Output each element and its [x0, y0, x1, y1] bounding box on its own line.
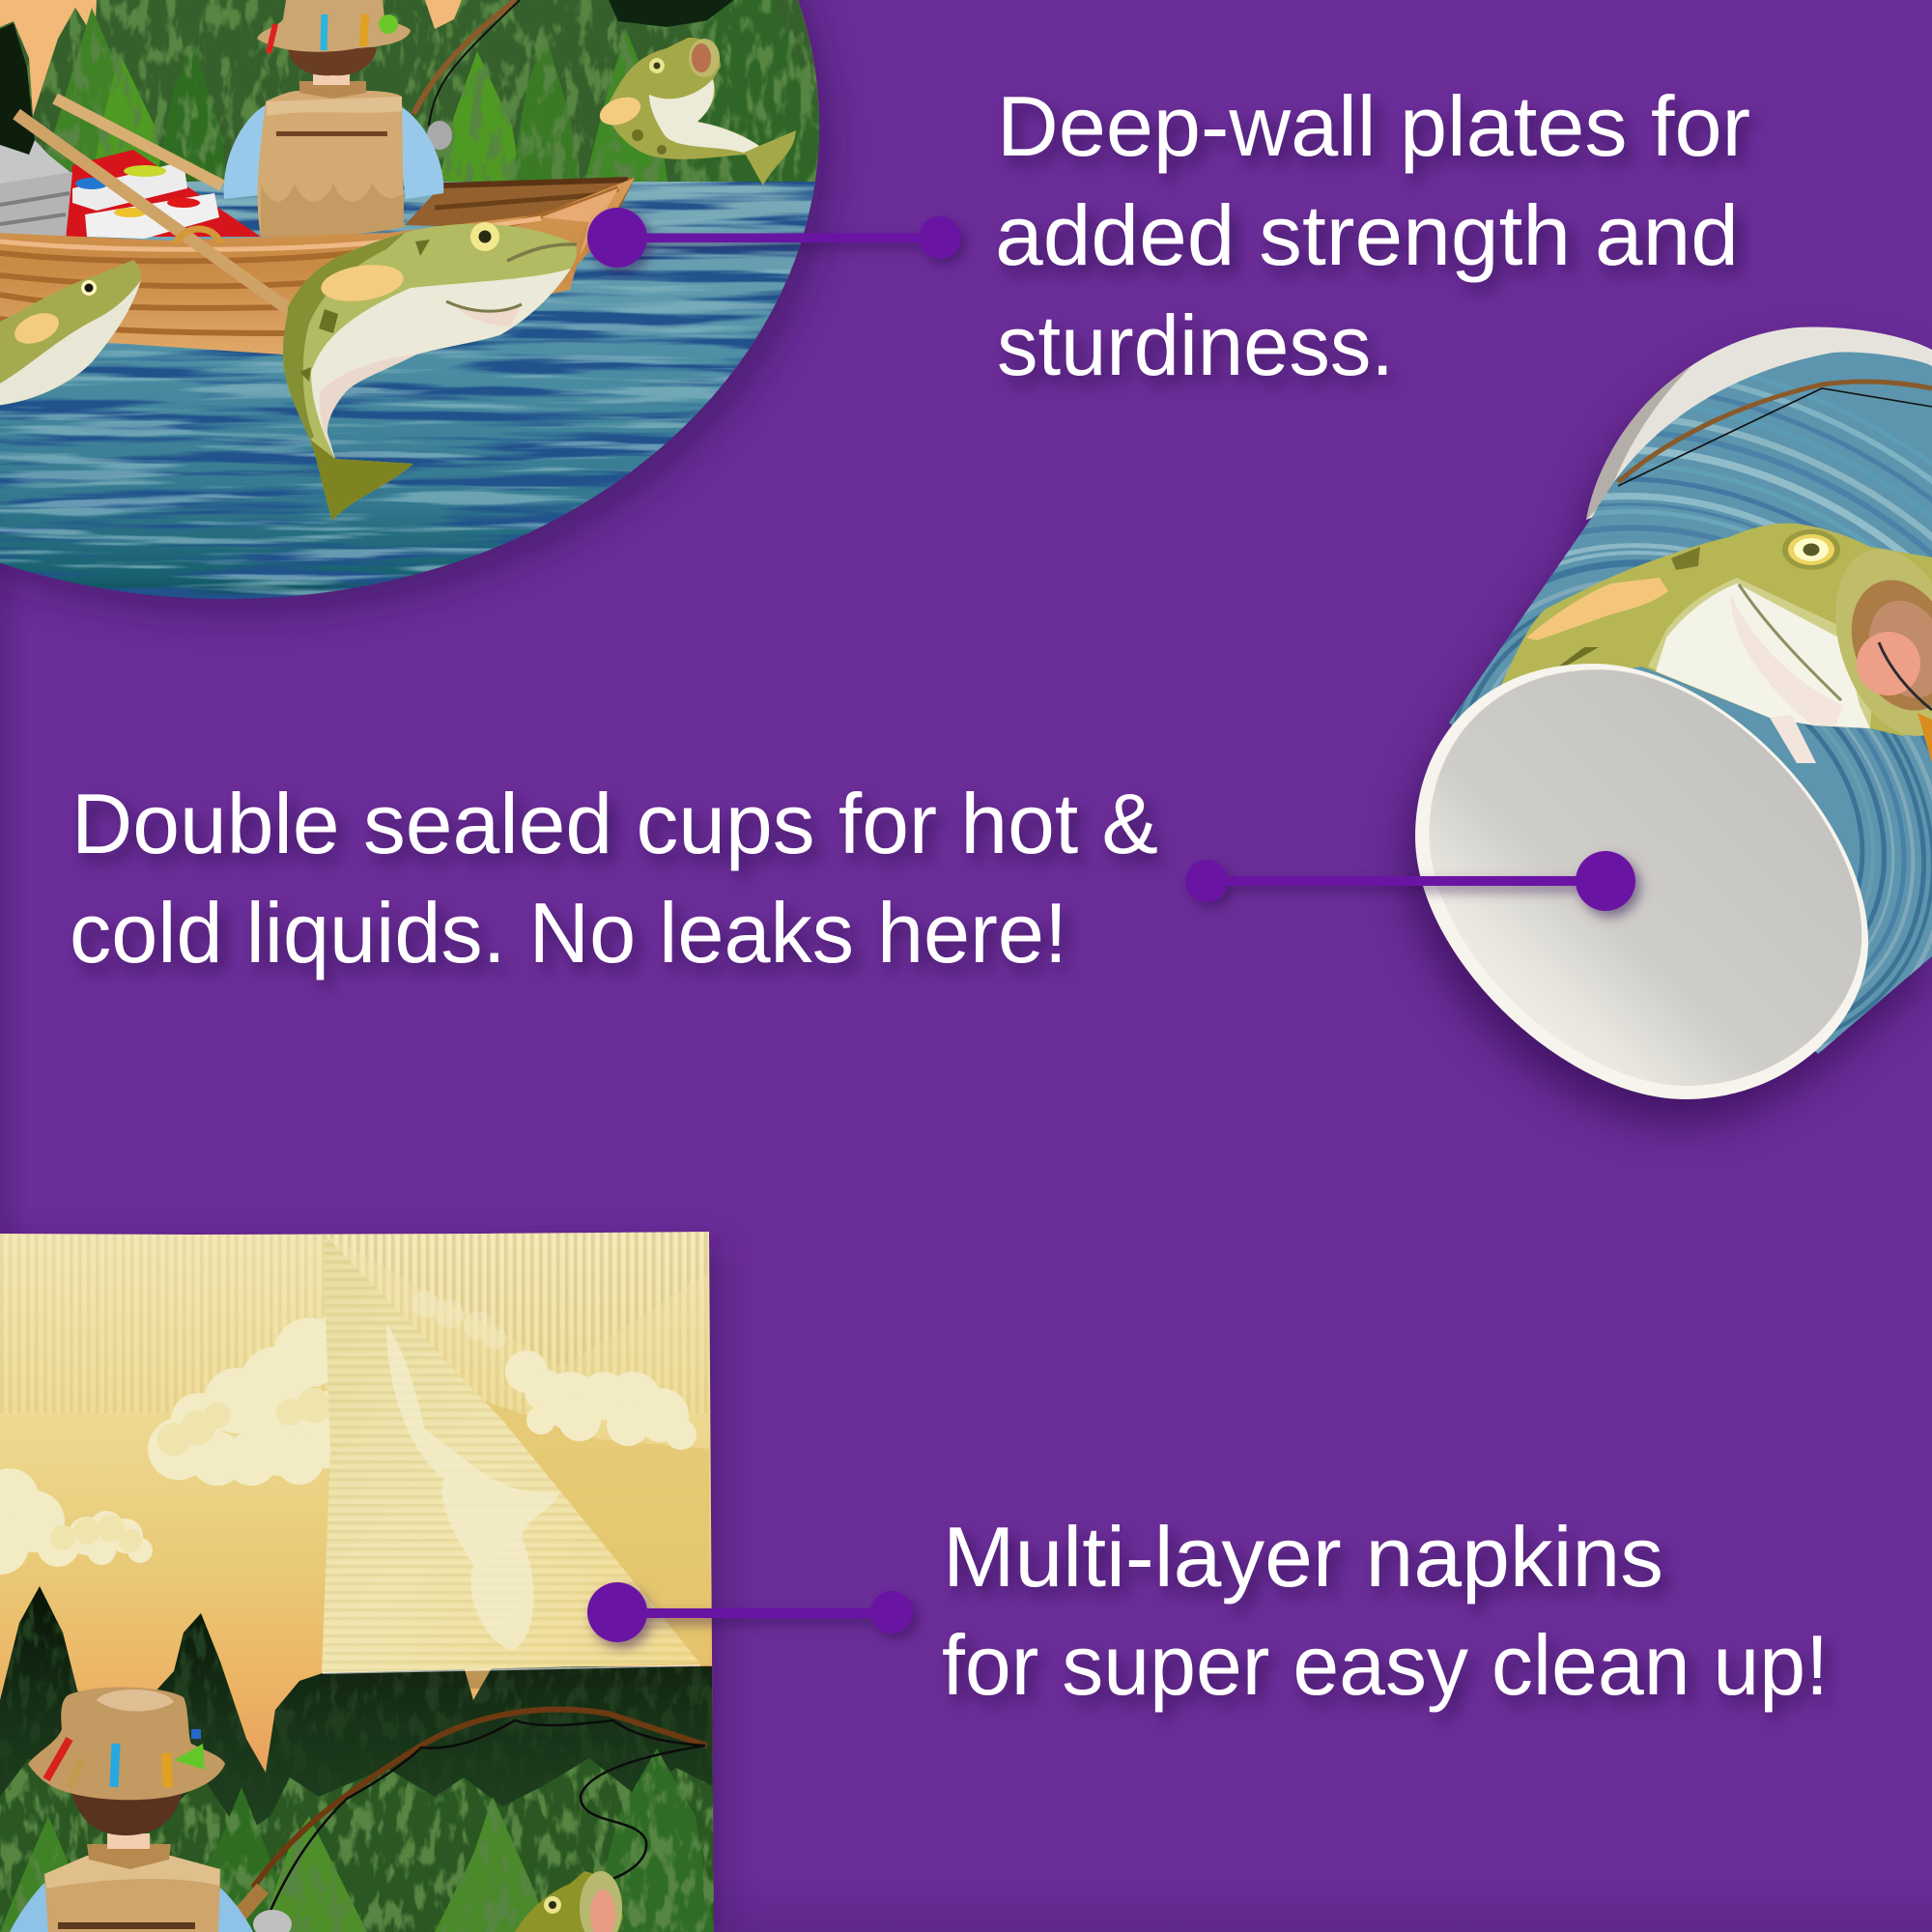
text: cups [70, 776, 1158, 980]
inner cloud tints [50, 1388, 331, 1552]
cup [1389, 327, 1932, 1144]
ribbed top band [0, 1232, 720, 1413]
text: napkins [942, 1509, 1829, 1713]
fish on napkin [515, 1871, 623, 1932]
boat hull [0, 178, 635, 355]
cup bottom [1415, 664, 1868, 1099]
boat back [405, 178, 635, 232]
forest on napkin [0, 1586, 715, 1932]
cup body with water pattern [1449, 352, 1932, 1061]
fish on cup [1500, 524, 1932, 763]
forest on plate [0, 0, 821, 251]
fishing rod on napkin [238, 1710, 707, 1932]
left fish [0, 260, 141, 406]
napkin [0, 1227, 720, 1932]
flap of napkin [322, 1233, 715, 1690]
oars [16, 99, 291, 311]
jumping fish [596, 38, 796, 185]
cup rim [1586, 327, 1932, 520]
plate shadow [0, 0, 834, 618]
text: cups: cold liquids. No leaks here! [70, 885, 1067, 980]
rod on cup [1618, 382, 1932, 486]
water on plate [0, 182, 831, 607]
text: cups: Double sealed cups for hot & [71, 776, 1158, 871]
plate connector [587, 208, 961, 268]
large fish [283, 222, 577, 521]
text: plates: sturdiness. [997, 298, 1394, 393]
cup connector [1185, 851, 1635, 911]
napkin connector [587, 1582, 913, 1642]
clouds on napkin [0, 1291, 696, 1575]
text: plates: Deep-wall plates for [997, 78, 1750, 174]
plate illustration [0, 0, 860, 607]
text: napkins: Multi-layer napkins [943, 1509, 1663, 1605]
text: napkins: for super easy clean up! [942, 1617, 1829, 1713]
fisherman on plate [224, 0, 443, 237]
napkin shadow [0, 1246, 720, 1932]
text: plates [995, 78, 1750, 393]
upper right corner of napkin [330, 1232, 707, 1335]
fold shading [483, 1401, 709, 1663]
text: plates: added strength and [995, 187, 1739, 283]
tackle and bucket [0, 140, 261, 240]
rod and reel in plate [413, 0, 520, 150]
fisherman on napkin [10, 1688, 253, 1932]
